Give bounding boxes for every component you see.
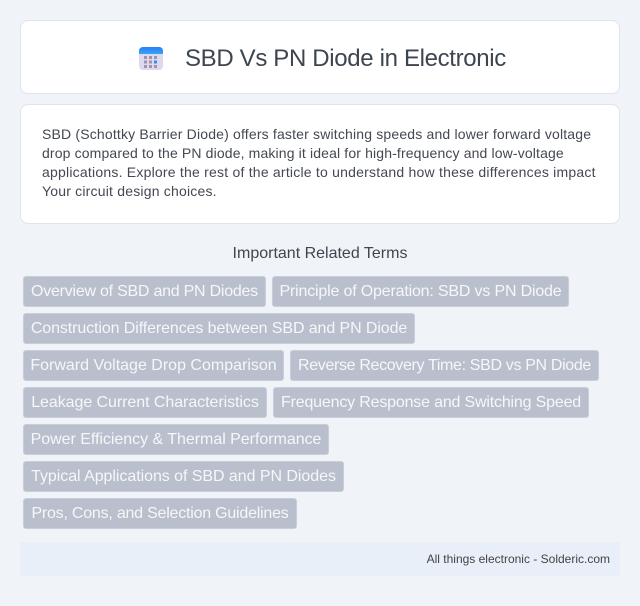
title: SBD Vs PN Diode in Electronic xyxy=(185,45,506,72)
tag xyxy=(23,313,415,344)
tag: Reverse Recovery Time: SBD vs PN Diode xyxy=(298,357,591,374)
tag: Typical Applications of SBD and PN Diodes xyxy=(31,468,336,485)
tag xyxy=(23,424,329,455)
tag xyxy=(23,387,267,418)
tag: Forward Voltage Drop Comparison xyxy=(30,357,277,374)
panel: title header xyxy=(20,20,620,94)
tag: Pros, Cons, and Selection Guidelines xyxy=(31,505,289,522)
text block: intro paragraph: SBD (Schottky Barrier Diode) offers faster switching speeds and lower forward voltage xyxy=(42,126,591,142)
tag: Frequency Response and Switching Speed xyxy=(281,394,581,411)
footer xyxy=(20,542,620,576)
tag xyxy=(23,461,344,492)
tag: Power Efficiency & Thermal Performance xyxy=(31,431,321,448)
text block: intro paragraph: applications. Explore the rest of the article to understand how these differences impact xyxy=(42,164,596,180)
tag: Overview of SBD and PN Diodes xyxy=(31,283,258,300)
icon: calendar xyxy=(139,47,163,70)
tag xyxy=(272,276,569,307)
tag: Leakage Current Characteristics xyxy=(31,394,259,411)
tag xyxy=(23,498,297,529)
text block: intro paragraph: drop compared to the PN diode, making it ideal for high-frequency and low-voltage xyxy=(42,145,564,161)
panel: term tags xyxy=(23,276,599,529)
tag xyxy=(273,387,589,418)
text block: intro paragraph: Your circuit design choices. xyxy=(42,183,217,199)
tag: Principle of Operation: SBD vs PN Diode xyxy=(280,283,562,300)
heading: related terms: Important Related Terms xyxy=(233,245,407,262)
panel: intro text xyxy=(20,104,620,224)
footer credit: All things electronic - Solderic.com xyxy=(427,552,610,566)
tag xyxy=(23,276,266,307)
tag: Construction Differences between SBD and PN Diode xyxy=(31,320,407,337)
tag xyxy=(290,350,599,381)
text block: intro paragraph xyxy=(42,126,596,199)
tag xyxy=(23,350,284,381)
